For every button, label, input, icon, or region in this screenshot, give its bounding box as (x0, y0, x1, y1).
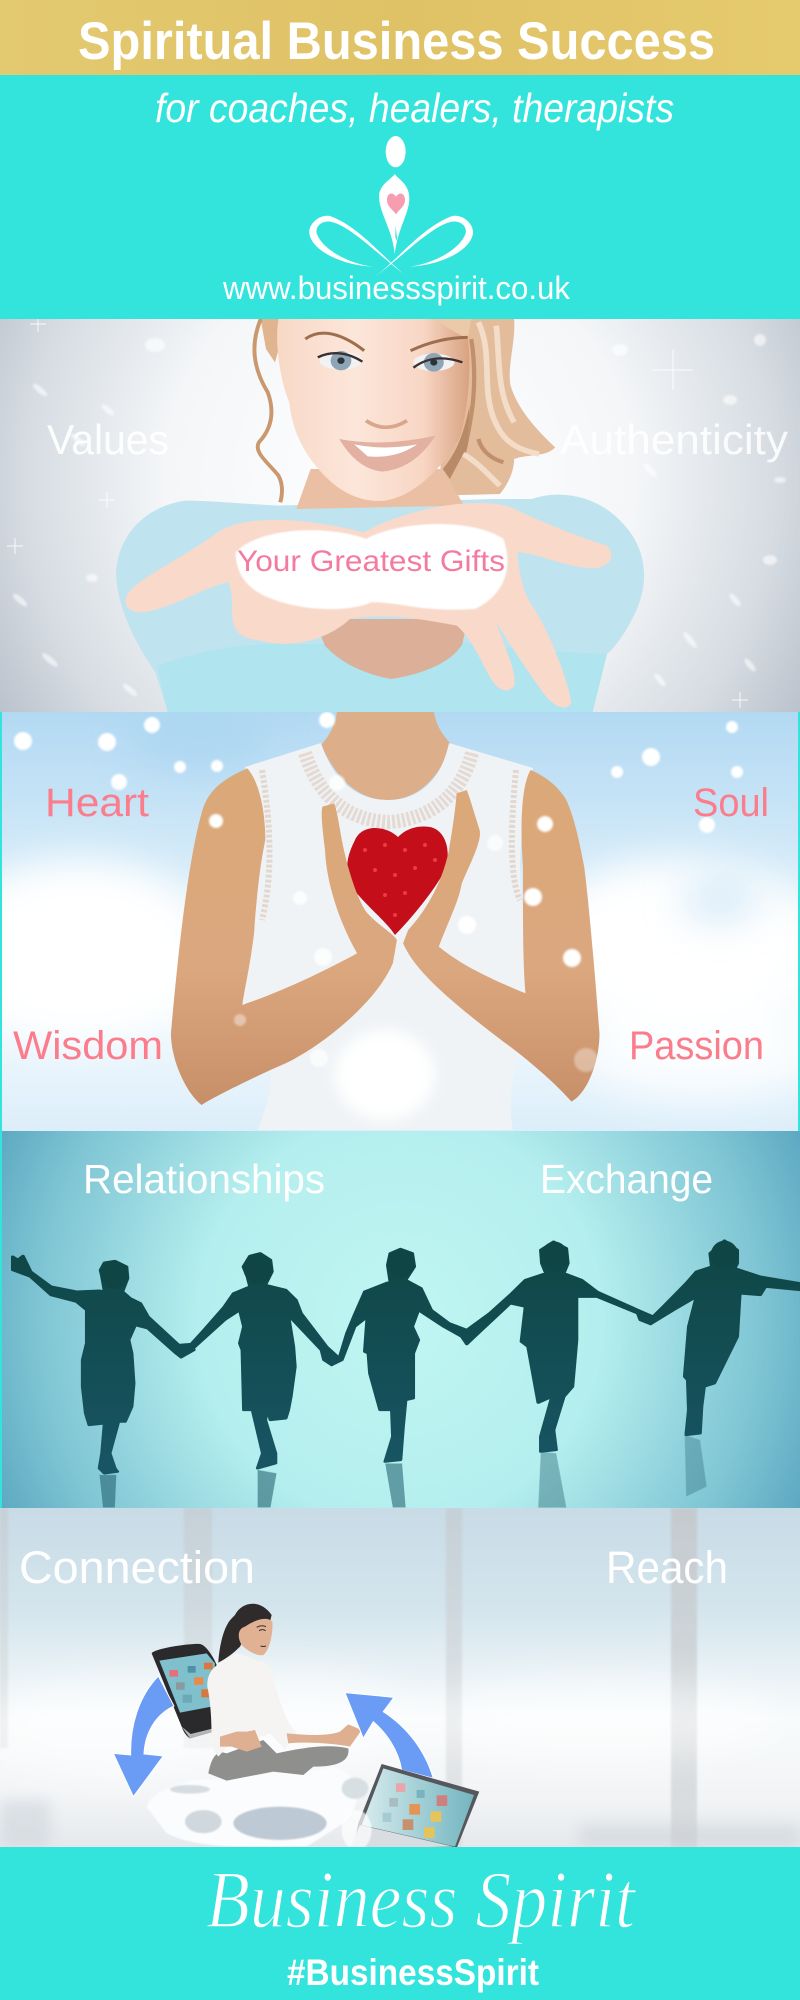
window columns (0, 1508, 697, 1847)
open hands (126, 503, 611, 707)
text: your greatest gifts: Your Greatest Gifts (237, 545, 505, 578)
arrow: blue curved up (345, 1693, 433, 1778)
lace collar (305, 753, 472, 822)
arms and hands (171, 768, 599, 1105)
footer hashtag: #BusinessSpirit (287, 1952, 539, 1993)
logo: meditating figure with heart (309, 136, 473, 277)
text: exchange: Exchange (540, 1156, 713, 1202)
title: Spiritual Business Success (78, 12, 715, 71)
text: soul: Soul (693, 781, 769, 825)
white top (242, 743, 533, 1130)
footer brand name: Business Spirit (206, 1854, 637, 1945)
sweater (116, 495, 644, 712)
text: values: Values (47, 416, 169, 463)
neck (296, 469, 464, 509)
falling snow (14, 712, 743, 1072)
header panel: turquoise block (0, 75, 800, 319)
text: relationships: Relationships (83, 1156, 325, 1202)
white glow in palms (236, 524, 507, 610)
text: connection: Connection (19, 1542, 255, 1593)
header band: gold title bar (0, 0, 800, 75)
text: heart: Heart (45, 781, 149, 825)
text: wisdom: Wisdom (13, 1024, 163, 1068)
footer panel: turquoise block (0, 1847, 800, 2000)
subtitle: for coaches, healers, therapists (155, 85, 674, 131)
arrow: blue curved down (113, 1676, 174, 1797)
woman offering open hands (116, 319, 644, 712)
text: reach: Reach (606, 1542, 728, 1593)
text: authenticity: Authenticity (560, 416, 788, 463)
red heart (347, 827, 448, 935)
meditating woman with devices (113, 1604, 479, 1850)
panel: heart and soul (0, 705, 800, 1131)
panel: relationships and exchange (0, 1131, 800, 1508)
curl of hair (254, 319, 282, 502)
nose and mouth (339, 421, 436, 472)
children silhouettes holding hands (13, 1241, 800, 1508)
panel: your greatest gifts (0, 316, 800, 712)
icon: laptop (342, 1764, 479, 1850)
icon: phone (152, 1644, 217, 1738)
face (277, 319, 469, 501)
cloud (148, 1778, 368, 1847)
panel: connection and reach (0, 1508, 800, 1850)
text: passion: Passion (629, 1024, 764, 1068)
chest and neckline (314, 619, 468, 679)
website url: www.businessspirit.co.uk (222, 270, 571, 306)
hair mass (421, 319, 555, 496)
eyes and brows (305, 333, 468, 372)
woman (207, 1604, 362, 1781)
neck (321, 712, 452, 800)
